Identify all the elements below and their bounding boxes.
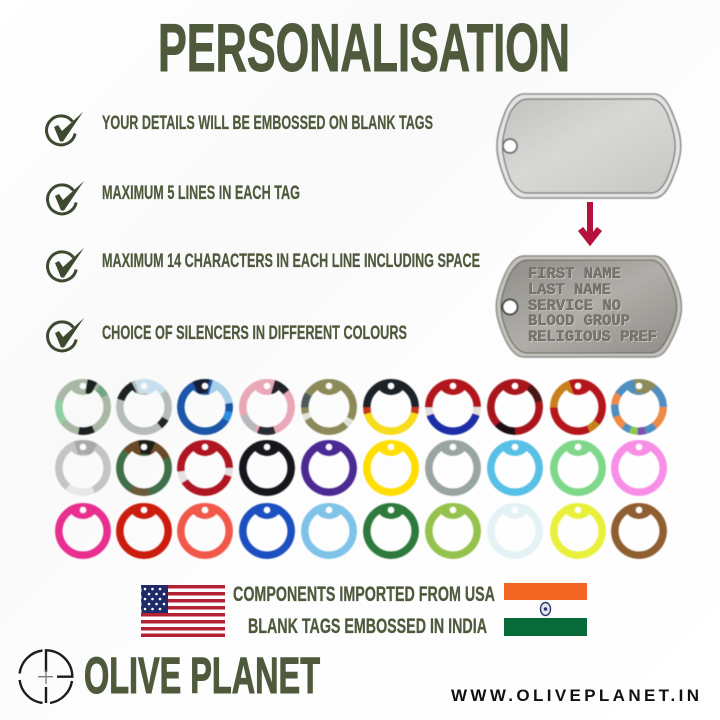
text: maximum characters: MAXIMUM 14 CHARACTERS IN EACH LINE INCLUDING SPACE [102,251,480,272]
icon: India flag [504,583,587,636]
arrow [579,202,601,245]
feature list [47,112,480,351]
icon: USA flag [141,585,225,637]
engraved text: LAST NAME [528,281,611,299]
engraved text [528,265,657,346]
engraved text: RELIGIOUS PREF [528,328,657,346]
row 3 [53,501,669,561]
text: maximum lines: MAXIMUM 5 LINES IN EACH TAG [102,183,300,204]
blank dog tag [497,94,681,198]
text: tags embossed: BLANK TAGS EMBOSSED IN INDIA [248,615,487,638]
engraved text: BLOOD GROUP [528,312,630,330]
text: embossed details: YOUR DETAILS WILL BE EMBOSSED ON BLANK TAGS [102,113,433,134]
logo wordmark: OLIVE PLANET [84,647,320,704]
icon: check 2 [48,181,84,214]
embossed dog tag [496,256,682,357]
engraved text: SERVICE NO [528,297,621,315]
row 2 [53,438,669,498]
text: silencer choice: CHOICE OF SILENCERS IN DIFFERENT COLOURS [102,323,407,344]
icon: logo crosshair [20,650,72,703]
icon: check 3 [48,248,84,281]
website url: WWW.OLIVEPLANET.IN [451,686,699,705]
row 1 [53,377,669,437]
silencer colour rings [53,377,669,561]
text: components imported: COMPONENTS IMPORTED FROM USA [233,583,495,606]
icon: check 4 [48,318,84,351]
icon: check 1 [47,112,83,145]
engraved text: FIRST NAME [528,265,621,283]
